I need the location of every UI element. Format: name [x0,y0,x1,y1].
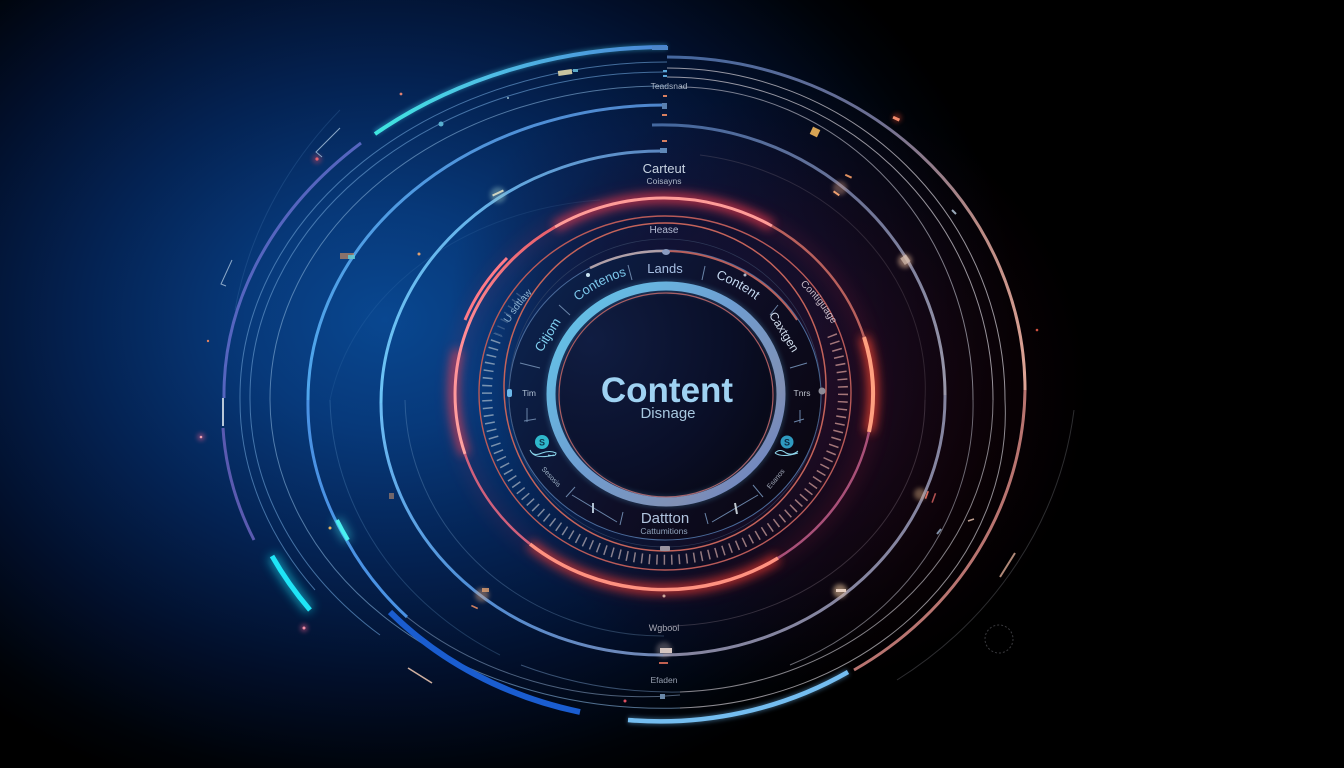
steel ring [551,286,781,502]
title: Content [601,371,733,410]
label: Content right: Content [717,271,760,300]
ring dots [507,249,826,598]
arc: white stub [222,398,224,426]
blue and grey ring two [381,125,945,655]
bottom bright blue arc [628,672,848,721]
label: top heading: Carteut [643,161,686,176]
central disc [559,293,773,497]
label: Tnrs: Tnrs [794,388,810,398]
label: Dattton: Dattton [641,510,689,527]
arc: left bright [455,227,555,454]
label: Efaden: Efaden [651,675,678,685]
label: top sub-heading: Coisayns [647,176,681,186]
label: Hease: Hease [650,225,679,236]
outer ring: left segments [223,47,667,540]
label: bottom sub-label: Cattumitions [640,526,688,536]
label: Esanos: Esanos [766,468,787,491]
icon: left badge [530,435,556,457]
label: Contenos: Contenos [574,270,626,300]
radial dividers [520,265,807,525]
tick marks: faint upper left [498,295,520,335]
label: outer left curved: U sdtlaw [504,289,532,322]
icon: left badge: S [539,438,545,448]
arc: lower-right dim [778,432,869,558]
label: Citjom: Citjom [531,315,564,354]
blue ring three [308,105,667,617]
inner band [509,250,821,540]
label: Tim: Tim [522,388,536,398]
top tick marks [652,46,668,153]
arc: top bright [555,198,772,227]
tick marks [487,335,843,560]
arc: bright top glow [375,47,667,133]
red thin ring with ticks [479,216,851,570]
label: Sesosis: Sesosis [540,466,562,489]
arc: purple lower left [223,428,254,540]
subtitle: Disnage [640,405,696,422]
arc: purple left [224,143,361,398]
icon: right badge: S [784,438,790,448]
arc: right bright [864,337,873,432]
label: Caxtgen: Caxtgen [766,309,802,355]
label: top small: Teadsnad [651,81,688,91]
arc: upper right [667,57,1025,390]
arc: upper-right dim [772,226,864,337]
arc: bottom bright [530,544,778,590]
arc: bright top [375,47,667,134]
label: Wgbool: Wgbool [649,623,679,633]
label: Lands: Lands [647,261,683,276]
arc: lower right [854,390,1025,670]
cyan accent arc [272,556,310,610]
thin orbit lines [235,62,1074,708]
peach inner arc [509,239,821,547]
arc: left parallel [465,258,507,320]
arc: lower-left [465,454,530,544]
glints and particles [197,69,1038,702]
outer ring: right segments [667,57,1025,670]
label: outer right curved: Contiguage [802,281,836,324]
icon: right badge [775,436,798,456]
dark blue bottom-left arc [390,612,580,712]
red glow ring [454,198,873,590]
